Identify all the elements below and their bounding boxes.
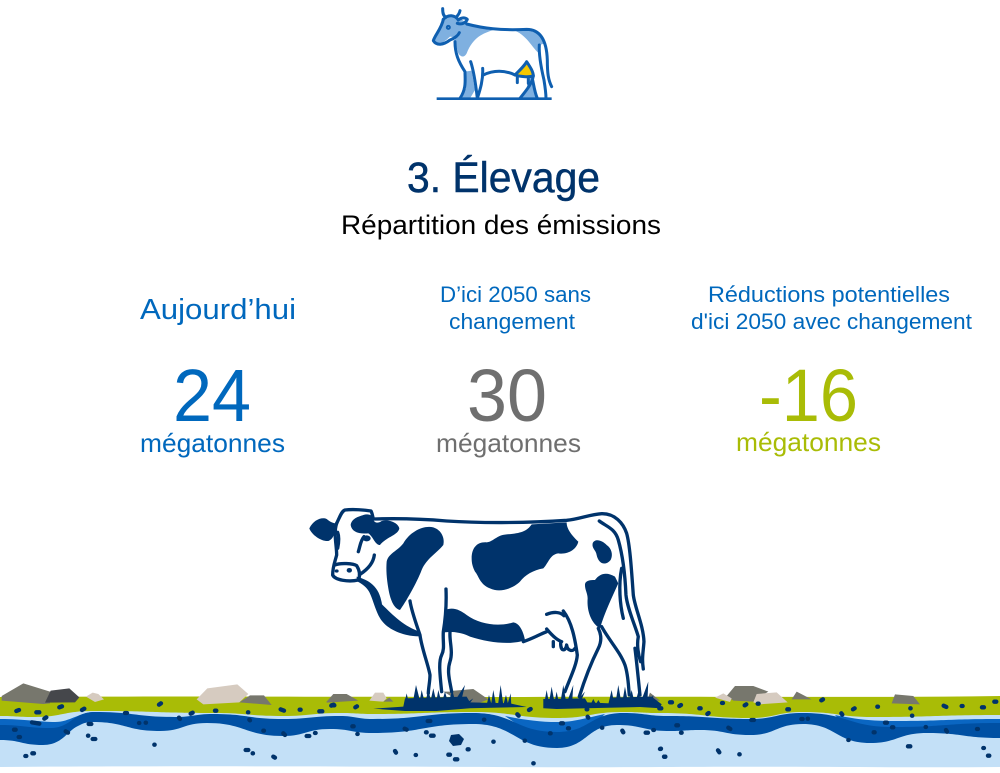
label: potential reductions: d'ici 2050 avec changement [691,309,972,334]
cow: white body [333,511,630,695]
unit: mégatonnes [436,428,581,458]
icon: small cow [433,9,552,99]
unit: mégatonnes [140,428,285,458]
cow: grass [373,682,662,711]
column: 2050 without change [436,282,591,458]
water layer: mid blue [0,712,1000,735]
value: 24: 24 [173,354,251,437]
column: today [140,294,296,458]
cow [309,510,662,711]
column: potential reductions [691,282,972,457]
label: potential reductions: Réductions potentielles [708,282,950,307]
title: 3. Élevage [407,154,600,202]
label: potential reductions [691,282,972,334]
soil layer: green [0,696,1000,718]
label: 2050 without change: D’ici 2050 sans [440,282,591,307]
soil and water particles [14,699,996,763]
value: 30: 30 [467,354,547,437]
rocks [2,683,920,705]
cow: patches [309,514,618,643]
subtitle: Répartition des émissions [341,210,661,240]
water layer: dark blue [0,712,1000,748]
label: 2050 without change [440,282,591,334]
rock: large dark stone [449,734,464,746]
cow: outline [333,510,644,697]
water layer: pale [0,705,1000,767]
label: 2050 without change: changement [449,309,575,334]
ground strip [0,683,1000,767]
unit: mégatonnes [736,427,881,457]
value: -16: -16 [759,354,858,437]
label: today: Aujourd’hui [140,294,296,326]
